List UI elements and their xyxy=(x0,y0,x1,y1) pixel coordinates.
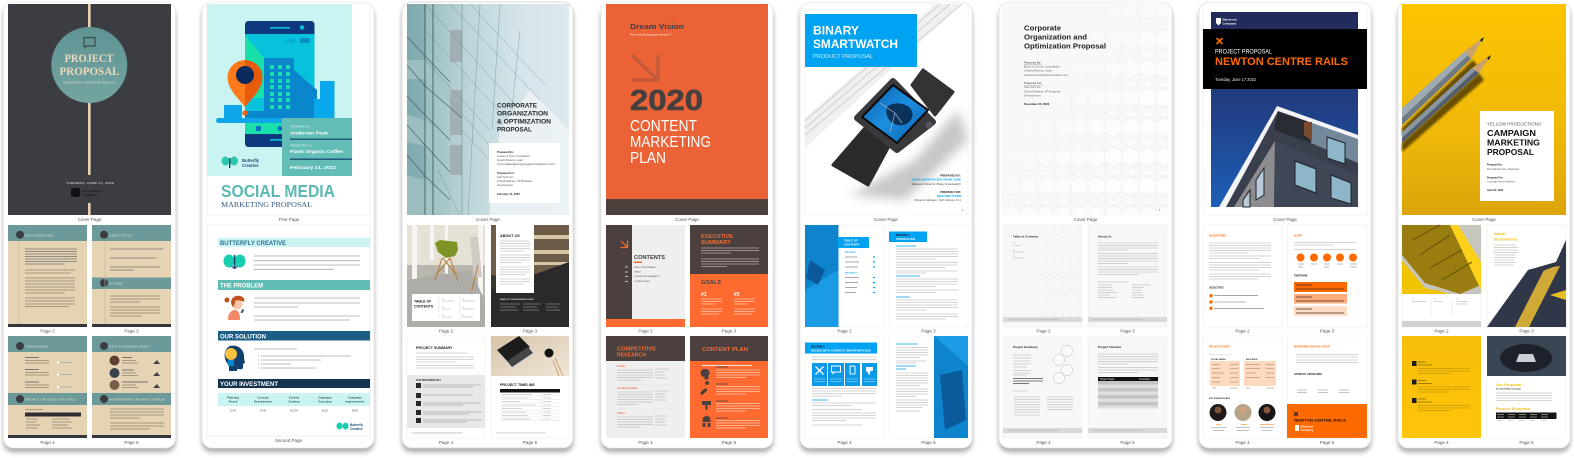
page 3 executive summary: SUMMARY xyxy=(701,240,732,246)
panel: black title box: PROJECT PROPOSAL xyxy=(1215,50,1273,56)
panel: card 1 project proposal: Page 4 xyxy=(40,440,55,445)
panel: black title box: Tuesday, June 17 2022 xyxy=(1215,77,1256,82)
panel: card 8 campaign marketing proposal xyxy=(1398,2,1570,448)
table: timeline xyxy=(1098,377,1158,408)
panel: black title box: NEWTON CENTRE RAILS xyxy=(1215,56,1348,68)
table: investment: Improvements xyxy=(345,400,365,404)
panel: orange footer: NEWTON CENTRE RAILS xyxy=(1294,418,1346,422)
cover page 5 xyxy=(805,4,968,215)
panel: prepared-by box: PRESENTED TO: xyxy=(290,144,313,148)
cover page 5: PREPARED BY: xyxy=(940,174,961,178)
second page: YOUR INVESTMENT xyxy=(220,382,278,388)
cover page 4 xyxy=(606,4,768,215)
page 2 contents: COMPETITIVE RESEARCH xyxy=(634,275,660,278)
white info box: Consultant@angelogpconsultants.com xyxy=(497,162,556,166)
page 3 introduction: INTRODUCTION xyxy=(896,238,915,241)
page 4 project budget xyxy=(1203,336,1282,438)
cover page 4: PLAN xyxy=(630,150,666,167)
icon: arrow xyxy=(632,55,659,80)
page 4 project summary: Project Summary xyxy=(1013,345,1038,349)
cover page 5: (Research Director, Binary Smartwatch) xyxy=(912,182,961,186)
page 5 project timeline xyxy=(491,336,569,438)
page 3 executive summary: EXECUTIVE xyxy=(701,234,733,240)
white info box: February 10, 2022 xyxy=(497,192,520,196)
page 4 project budget: KEY STAKEHOLDERS xyxy=(1209,397,1231,400)
white title box: April 24, 2022 xyxy=(1487,189,1504,192)
panel: card 1 project proposal xyxy=(4,2,176,448)
page 3 introduction xyxy=(889,225,968,327)
page 4 project summary xyxy=(1003,336,1082,438)
cover page 3: PROPOSAL xyxy=(497,126,532,134)
cover page 6: Organization and xyxy=(1024,34,1087,42)
panel: blue title box: SMARTWATCH xyxy=(813,37,898,51)
panel: prepared-by box: PREPARED BY: xyxy=(290,124,311,128)
icons: circled outlines xyxy=(1054,346,1072,384)
second page: BUTTERFLY CREATIVE xyxy=(220,241,286,247)
cover page 6: Bruce & Connor Consultants xyxy=(1024,64,1060,68)
page 4 timeframe and budget: PROJECT BUDGET (IN USD) xyxy=(25,398,76,402)
cover page 3: ORGANIZATION xyxy=(497,110,549,118)
page 3 scope and timeframe xyxy=(1287,225,1367,327)
panel: card 8 campaign marketing proposal: Page 5 xyxy=(1519,440,1534,445)
cover page 3: & OPTIMIZATION xyxy=(497,118,552,126)
panel: card 7 newton centre rails: Page 5 xyxy=(1320,440,1335,445)
page 5 proposal and schedule xyxy=(1487,336,1566,438)
cover page 6: Fast Tech Inc. xyxy=(1024,85,1042,89)
page 2 background: BACKGROUND xyxy=(25,233,54,237)
page 4 competitive research: COMPETITIVE xyxy=(617,346,657,352)
white info box: Prepared By: xyxy=(497,150,514,154)
first page: MARKETING PROPOSAL xyxy=(221,200,312,209)
page 2 toc: SECTION 2 xyxy=(845,272,857,274)
cover page 6: Optimization Proposal xyxy=(1024,44,1106,50)
page 4 project summary xyxy=(407,336,485,438)
second page: THE PROBLEM xyxy=(220,284,263,290)
panel: card 8 campaign marketing proposal: Cover Page xyxy=(1472,217,1496,222)
panel: orange footer xyxy=(1287,404,1367,438)
icon: butterfly xyxy=(224,254,246,269)
page 3 about: About xyxy=(1494,231,1506,236)
panel: blue title box xyxy=(805,14,917,67)
logo: butterfly creative small: Butterfly xyxy=(350,423,363,427)
photo: glass building xyxy=(407,4,569,215)
white title box: YELLOW PRODUCTIONS xyxy=(1487,122,1541,126)
cover page 4: Are you living your dream? xyxy=(630,32,671,36)
page 2 table of contents xyxy=(1003,225,1082,327)
panel: card 2 social media marketing proposal: Second Page xyxy=(275,438,303,443)
illustration: phone and city xyxy=(216,21,334,147)
page 2 contents xyxy=(606,225,685,327)
photo: pencils xyxy=(1402,37,1491,152)
icon: speech bubble xyxy=(84,38,95,48)
page 3 executive summary: #1 xyxy=(701,292,707,298)
panel: card 6 hexagon corporate proposal: Page 2 xyxy=(1036,328,1051,334)
white info box: Angelo Nelsoni, Lead xyxy=(497,158,523,162)
logo: butterfly creative xyxy=(222,156,260,168)
page 5 smartwatch market xyxy=(889,336,968,438)
page 5 proposal and schedule: The Small Slide Campaign xyxy=(1496,388,1522,390)
panel: card 3 corporate organization proposal: Page 5 xyxy=(523,440,538,445)
panel: blue title box: BINARY xyxy=(813,24,859,38)
page 2 toc: CONTENTS xyxy=(844,242,860,246)
white title box: Prepared For: xyxy=(1487,176,1504,180)
table: investment xyxy=(218,393,370,412)
page 4 competitive research: RESEARCH xyxy=(617,352,646,358)
panel: prepared-by box: Flash Organic Coffee xyxy=(290,149,343,155)
page 2 stairs xyxy=(1402,225,1481,327)
panel: card 1 project proposal: Page 2 xyxy=(40,328,55,334)
page 3 about us xyxy=(1088,225,1167,327)
icon: head with light bulb xyxy=(225,346,245,371)
first page xyxy=(207,4,370,215)
panel: card 6 hexagon corporate proposal: Cover Page xyxy=(1074,217,1098,222)
panel: card 4 content marketing plan: Page 3 xyxy=(722,328,737,334)
panel: card 2 social media marketing proposal xyxy=(202,2,374,448)
cover page 4: Dream Vision xyxy=(630,22,684,31)
panel: black title box xyxy=(1203,29,1367,89)
white title box: Prepared By: xyxy=(1487,164,1503,166)
page 2 background xyxy=(1203,225,1282,327)
panel: card 7 newton centre rails: Cover Page xyxy=(1273,217,1297,222)
cover page 3: CORPORATE xyxy=(497,102,537,110)
cover page 8 xyxy=(1402,4,1566,215)
page 3 about: 98 Solutions xyxy=(1494,236,1519,242)
panel: card 6 hexagon corporate proposal: Page 4 xyxy=(1036,440,1051,445)
cover page 6: Kristoff Harkers, VP Business xyxy=(1024,90,1061,94)
page 2 contents: GOALS xyxy=(634,270,642,274)
photo: building xyxy=(1211,12,1358,207)
white info box xyxy=(489,143,560,203)
icon: tools xyxy=(1216,38,1222,44)
panel: card 4 content marketing plan: Cover Page xyxy=(675,217,699,222)
page 4 project budget: SOCIAL MEDIA xyxy=(1211,358,1226,361)
page 3 objectives and scope: SCOPE xyxy=(109,282,123,286)
cover page 6: Development xyxy=(1024,94,1041,98)
white title box: MARKETING xyxy=(1487,138,1540,148)
page 2 toc: SECTION 1 xyxy=(845,252,857,254)
logo: butterfly creative: Creative xyxy=(242,163,259,168)
white info box: Kristoff Harkers, VP Business xyxy=(497,179,533,183)
white title box: Chandith Aimee Harbison xyxy=(1487,180,1516,184)
page 5 content plan xyxy=(690,336,768,438)
table: investment: Development xyxy=(254,400,272,404)
icon: location pin xyxy=(228,60,262,116)
page 2 chair photo xyxy=(407,225,485,327)
page 4 timeframe and budget xyxy=(8,336,87,438)
page 3 about xyxy=(1487,225,1566,327)
panel: card 7 newton centre rails xyxy=(1199,2,1371,448)
page 2 background: BACKGROUND xyxy=(1209,234,1226,237)
cover page 7 xyxy=(1203,4,1367,215)
white title box: Meredith Pearson, Marketing xyxy=(1487,168,1520,171)
page 4 timeframe and budget: TIMEFRAME xyxy=(25,344,48,348)
panel: card 5 binary smartwatch: Page 5 xyxy=(921,440,936,445)
panel: card 4 content marketing plan: Page 4 xyxy=(638,440,653,445)
page 3 objectives and scope xyxy=(92,225,171,327)
cover page 6: Prepared By: xyxy=(1024,60,1041,64)
logo: blackrock company xyxy=(1216,18,1237,26)
table: investment: Planning xyxy=(227,396,239,400)
page 5 monitoring and evaluation xyxy=(1287,336,1367,438)
icons: content plan topics xyxy=(700,369,711,427)
page 5 project timeline xyxy=(1088,336,1167,438)
panel: card 4 content marketing plan: Page 5 xyxy=(722,440,737,445)
panel: card 3 corporate organization proposal: Cover Page xyxy=(476,217,500,222)
icon: girl with phone xyxy=(224,296,244,320)
panel: orange footer: Company xyxy=(1300,428,1314,432)
cover page 4: CONTENT xyxy=(630,118,697,135)
page 3 about us: ABOUT US xyxy=(500,234,520,238)
cover page 1 xyxy=(8,4,171,215)
page 5 content plan: CONTENT PLAN xyxy=(702,347,748,353)
panel: card 5 binary smartwatch xyxy=(800,2,972,448)
logo: butterfly creative small: Creative xyxy=(350,427,363,431)
page 2 contents: CONTENT PLAN xyxy=(634,280,650,283)
cover page 5: 1 xyxy=(961,208,963,212)
table: investment: Period xyxy=(229,400,238,404)
page 2 chair photo: CONTENTS xyxy=(414,304,434,308)
page 3 about us xyxy=(491,225,569,327)
page 4 competitive research: K-Files xyxy=(617,365,626,368)
panel: blue title box: PRODUCT PROPOSAL xyxy=(813,54,873,60)
cover page 6: November 20, 2022 xyxy=(1024,102,1050,106)
white info box: Prepared For: xyxy=(497,171,515,175)
page 4 project summary: PROJECT SUMMARY xyxy=(416,346,453,350)
page 4 project budget: PROJECT BUDGET xyxy=(1209,346,1231,348)
page 4 issues: ISSUES WITH CURRENT SMARTWATCHES xyxy=(811,350,871,352)
panel: card 5 binary smartwatch: Page 3 xyxy=(921,328,936,334)
panel: card 6 hexagon corporate proposal xyxy=(999,2,1172,448)
page 2 toc: TABLE OF xyxy=(844,238,858,242)
cover page 3 xyxy=(407,4,569,215)
page 5 project timeline: Project Timeline xyxy=(1098,345,1121,349)
panel: card 8 campaign marketing proposal: Page 3 xyxy=(1519,328,1534,334)
page 2 background xyxy=(8,225,87,327)
page 4 yellow xyxy=(1402,336,1481,438)
cover page 5: SHIRA KINGSTON AND SHARY JANE xyxy=(912,178,961,182)
page 2 stairs: Table of Contents xyxy=(1412,288,1443,292)
page 5 project timeline: PROJECT TIMELINE xyxy=(500,383,535,387)
cover page 6: Cristina Berluce, Lead xyxy=(1024,68,1052,72)
panel: card 3 corporate organization proposal xyxy=(402,2,573,448)
table: timeline: Project Tasks xyxy=(1100,378,1115,381)
page 4 project summary: OUR METHODOLOGY xyxy=(416,379,441,382)
cover page 6: 1 xyxy=(1159,208,1161,212)
panel: card 6 hexagon corporate proposal: Page 3 xyxy=(1120,328,1135,334)
panel: card 8 campaign marketing proposal: Page 4 xyxy=(1434,440,1449,445)
page 3 about us: NAME OF THE BUSINESS/CLIENT xyxy=(500,298,535,301)
table: investment: Campaign xyxy=(348,396,362,400)
page 2 background: OBJECTIVES xyxy=(1209,288,1224,290)
panel: prepared-by box: Anderson Peak xyxy=(290,130,328,136)
panel: card 7 newton centre rails: Page 4 xyxy=(1235,440,1250,445)
cover page 1: COMPANY xyxy=(82,193,98,197)
table: timeline: Timeframe xyxy=(1139,378,1151,381)
panel: card 5 binary smartwatch: Page 4 xyxy=(837,440,852,445)
cover page 5: (Finance Manager, Tech Venture Co.) xyxy=(914,198,961,202)
panel: card 7 newton centre rails: Page 3 xyxy=(1320,328,1335,334)
cover page 6: Corporate xyxy=(1024,26,1061,32)
page 3 introduction: SECTION 1: xyxy=(896,234,910,237)
page 4 issues: SECTION 2: xyxy=(811,346,825,348)
portraits xyxy=(1210,404,1276,421)
logo: blackrock company: Blackrock xyxy=(1222,18,1237,22)
page 3 scope and timeframe: TIMEFRAME xyxy=(1294,274,1308,278)
white title box: CAMPAIGN xyxy=(1487,128,1536,138)
page 3 about us: About Us xyxy=(1098,234,1112,238)
logo: butterfly creative: Butterfly xyxy=(242,158,260,163)
first page: SOCIAL MEDIA xyxy=(221,181,335,201)
cover page 1: BLACKROCK xyxy=(82,189,102,193)
photo: smartwatch xyxy=(833,70,968,200)
cover page 5: PREPARE FOR: xyxy=(940,190,961,194)
cover page 6: cristina.berlucci@bconsultants.com xyxy=(1024,73,1069,77)
panel: card 3 corporate organization proposal: Page 3 xyxy=(523,328,538,334)
page 4 competitive research: Tiktica xyxy=(617,412,625,415)
white title box: PROPOSAL xyxy=(1487,147,1534,157)
table: investment: $700 xyxy=(260,408,267,412)
panel: orange footer: Blackrock xyxy=(1300,424,1314,428)
page 2 table of contents: Table of Contents xyxy=(1013,234,1038,238)
table: investment: Execution xyxy=(318,400,332,404)
panel: card 3 corporate organization proposal: Page 2 xyxy=(439,328,454,334)
cover page 4: MARKETING xyxy=(630,134,711,151)
page 3 executive summary: GOALS xyxy=(701,280,721,286)
page 5 proposal and schedule: Project Schedule xyxy=(1496,406,1531,411)
cover page 1: TUESDAY, JUNE 17, 2022 xyxy=(66,181,114,185)
cover page 6 xyxy=(1003,4,1168,215)
panel: card 1 project proposal: Page 5 xyxy=(124,440,139,445)
page 4 project budget: INFLUENCE xyxy=(1246,359,1258,361)
panel: card 8 campaign marketing proposal: Page 2 xyxy=(1434,328,1449,334)
table: investment: $700 xyxy=(230,408,237,412)
page 4 competitive research: K-Link Key Notes xyxy=(617,387,638,390)
page 5 stakeholders and monitoring: MONITORING & EVALUATION xyxy=(109,398,166,402)
table: investment: $200 xyxy=(322,408,329,412)
page 2 contents: EXECUTIVE SUMMARY xyxy=(634,266,657,269)
page 5 monitoring and evaluation: APPROVAL SIGNATURES xyxy=(1294,373,1323,376)
panel: card 2 social media marketing proposal: First Page xyxy=(279,217,300,222)
page 5 stakeholders and monitoring xyxy=(92,336,171,438)
white title box xyxy=(1480,111,1554,201)
page 2 contents: CONTENTS xyxy=(634,255,665,261)
panel: card 7 newton centre rails: Page 2 xyxy=(1235,328,1250,334)
table: investment: $800 xyxy=(352,408,359,412)
table: investment: Content xyxy=(289,396,299,400)
page 3 executive summary xyxy=(690,225,768,327)
page 2 toc xyxy=(805,225,884,327)
panel: card 1 project proposal: Page 3 xyxy=(124,328,139,334)
cover page 4: 2020 xyxy=(630,85,703,117)
page 2 chair photo: TABLE OF xyxy=(414,300,432,304)
page 3 objectives and scope: OBJECTIVES xyxy=(109,233,132,237)
logo: butterfly creative small xyxy=(336,422,363,431)
white info box: Jensen & Teler Consultants xyxy=(497,154,530,158)
cover page 5: BRAYDEN TYSON xyxy=(937,194,961,198)
panel: card 3 corporate organization proposal: Page 4 xyxy=(439,440,454,445)
panel: card 4 content marketing plan xyxy=(601,2,773,448)
logo: blackrock company: Company xyxy=(1222,22,1236,26)
table: investment: Creation xyxy=(288,400,300,404)
table: investment: $1000 xyxy=(290,408,298,412)
page 3 scope and timeframe: SCOPE xyxy=(1294,235,1303,237)
page 5 stakeholders and monitoring: KEY STAKEHOLDERS xyxy=(109,344,149,348)
panel: prepared-by box: February 21, 2022 xyxy=(290,165,336,171)
table: project timeline xyxy=(500,389,560,420)
cover page 1: PROJECT xyxy=(64,51,114,65)
page 5 monitoring and evaluation: MONITORING AND EVALUATION xyxy=(1294,346,1330,348)
panel: prepared-by box xyxy=(282,118,352,176)
panel: card 1 project proposal: Cover Page xyxy=(78,217,102,222)
second page: OUR SOLUTION xyxy=(220,334,266,340)
white info box: Development xyxy=(497,183,513,187)
second page xyxy=(207,225,370,436)
table: investment: Concept xyxy=(257,396,269,400)
table: investment: Campaign xyxy=(318,396,332,400)
page 3 executive summary: #2 xyxy=(734,292,740,298)
white info box: Fast Tech Inc. xyxy=(497,175,514,179)
table: schedule xyxy=(1496,412,1556,420)
panel: card 6 hexagon corporate proposal: Page 5 xyxy=(1120,440,1135,445)
page 4 competitive research xyxy=(606,336,685,438)
panel: card 4 content marketing plan: Page 2 xyxy=(638,328,653,334)
panel: card 5 binary smartwatch: Page 2 xyxy=(837,328,852,334)
page 4 issues xyxy=(805,336,884,438)
cover page 6: Prepared For: xyxy=(1024,81,1042,85)
cover page 1: PROPOSAL xyxy=(60,64,120,78)
cover page 1: NEWTON CENTRE RAILS xyxy=(63,80,115,84)
page 5 proposal and schedule: Our Proposal xyxy=(1496,382,1521,387)
panel: card 5 binary smartwatch: Cover Page xyxy=(874,217,898,222)
